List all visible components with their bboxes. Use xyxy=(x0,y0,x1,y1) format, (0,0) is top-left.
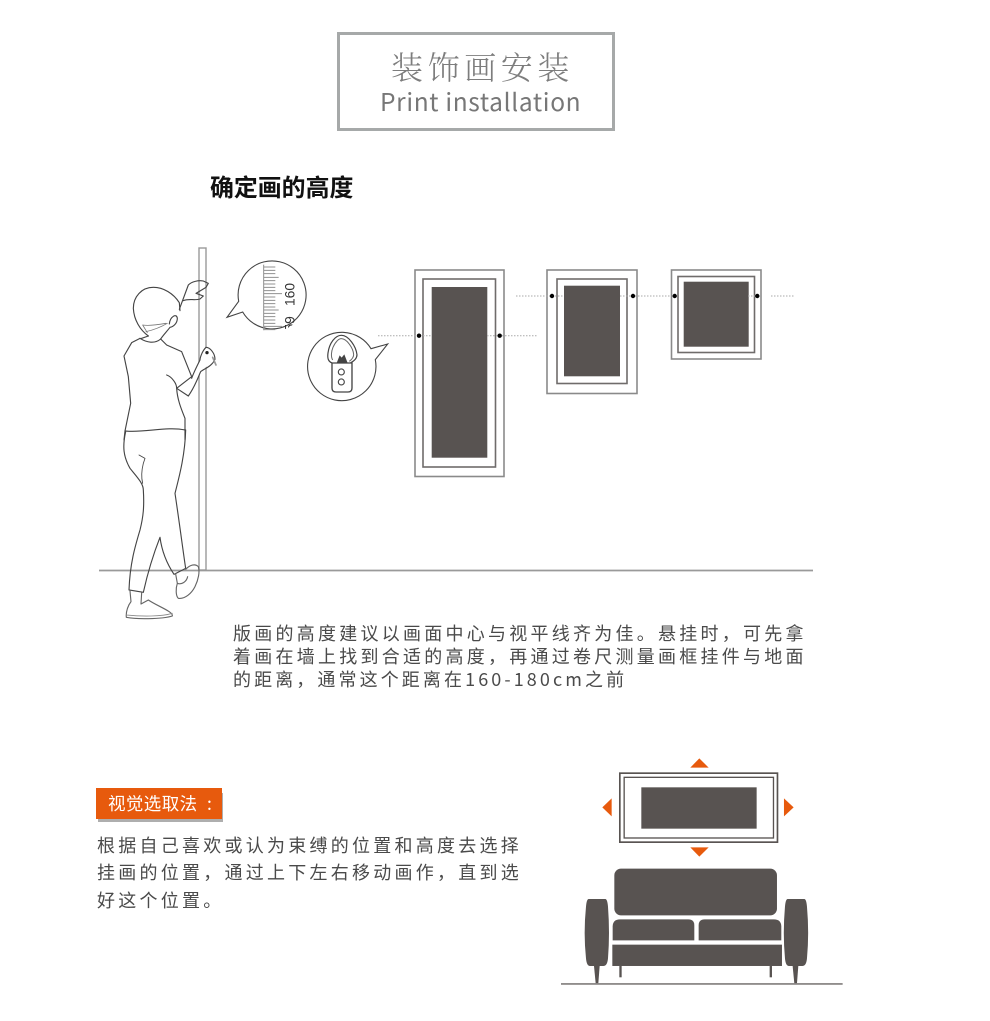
paragraph: visual method: 挂画的位置，通过上下左右移动画作，直到选 xyxy=(97,859,522,885)
callout: ruler reading 160 xyxy=(227,261,306,332)
sofa scene xyxy=(561,758,843,984)
frame: medium print xyxy=(516,270,684,394)
paragraph: height advice xyxy=(233,620,807,692)
sofa xyxy=(585,869,808,983)
callout: hanging hook xyxy=(308,332,388,401)
label: visual selection xyxy=(96,788,223,822)
wide framed print xyxy=(620,773,777,842)
frame: square print xyxy=(672,270,761,359)
paragraph: height advice: 的距离，通常这个距离在160-180cm之前 xyxy=(233,666,627,692)
arrow right xyxy=(784,798,794,816)
hook detail xyxy=(328,335,357,392)
measuring ruler on wall xyxy=(199,248,206,570)
arrow up xyxy=(690,758,709,768)
title: Chinese: 装饰画安装 xyxy=(391,43,574,89)
frame: tall print xyxy=(378,270,537,476)
ruler number 160: 160 xyxy=(282,283,297,306)
title box xyxy=(338,34,614,130)
floor line xyxy=(99,570,813,572)
paragraph: height advice: 着画在墙上找到合适的高度，再通过卷尺测量画框挂件与地面 xyxy=(233,643,807,669)
sofa floor line xyxy=(561,981,843,986)
person measuring wall xyxy=(124,281,216,619)
paragraph: visual method: 根据自己喜欢或认为束缚的位置和高度去选择 xyxy=(97,832,522,858)
arrow left xyxy=(602,798,612,816)
arrow down xyxy=(690,847,709,857)
heading: determine height: 确定画的高度 xyxy=(210,168,353,203)
paragraph: visual method: 好这个位置。 xyxy=(97,887,224,913)
paragraph: visual method xyxy=(97,832,522,913)
person: legs and shoes xyxy=(124,430,199,619)
title: English: Print installation xyxy=(380,84,581,119)
paragraph: height advice: 版画的高度建议以画面中心与视平线齐为佳。悬挂时，可先拿 xyxy=(233,620,807,646)
sight line far right xyxy=(771,295,795,297)
label: visual selection: 视觉选取法 xyxy=(108,791,198,816)
ruler number 59: 59 xyxy=(282,316,297,332)
person: upper body xyxy=(124,281,216,440)
label: visual selection: : xyxy=(207,791,212,816)
